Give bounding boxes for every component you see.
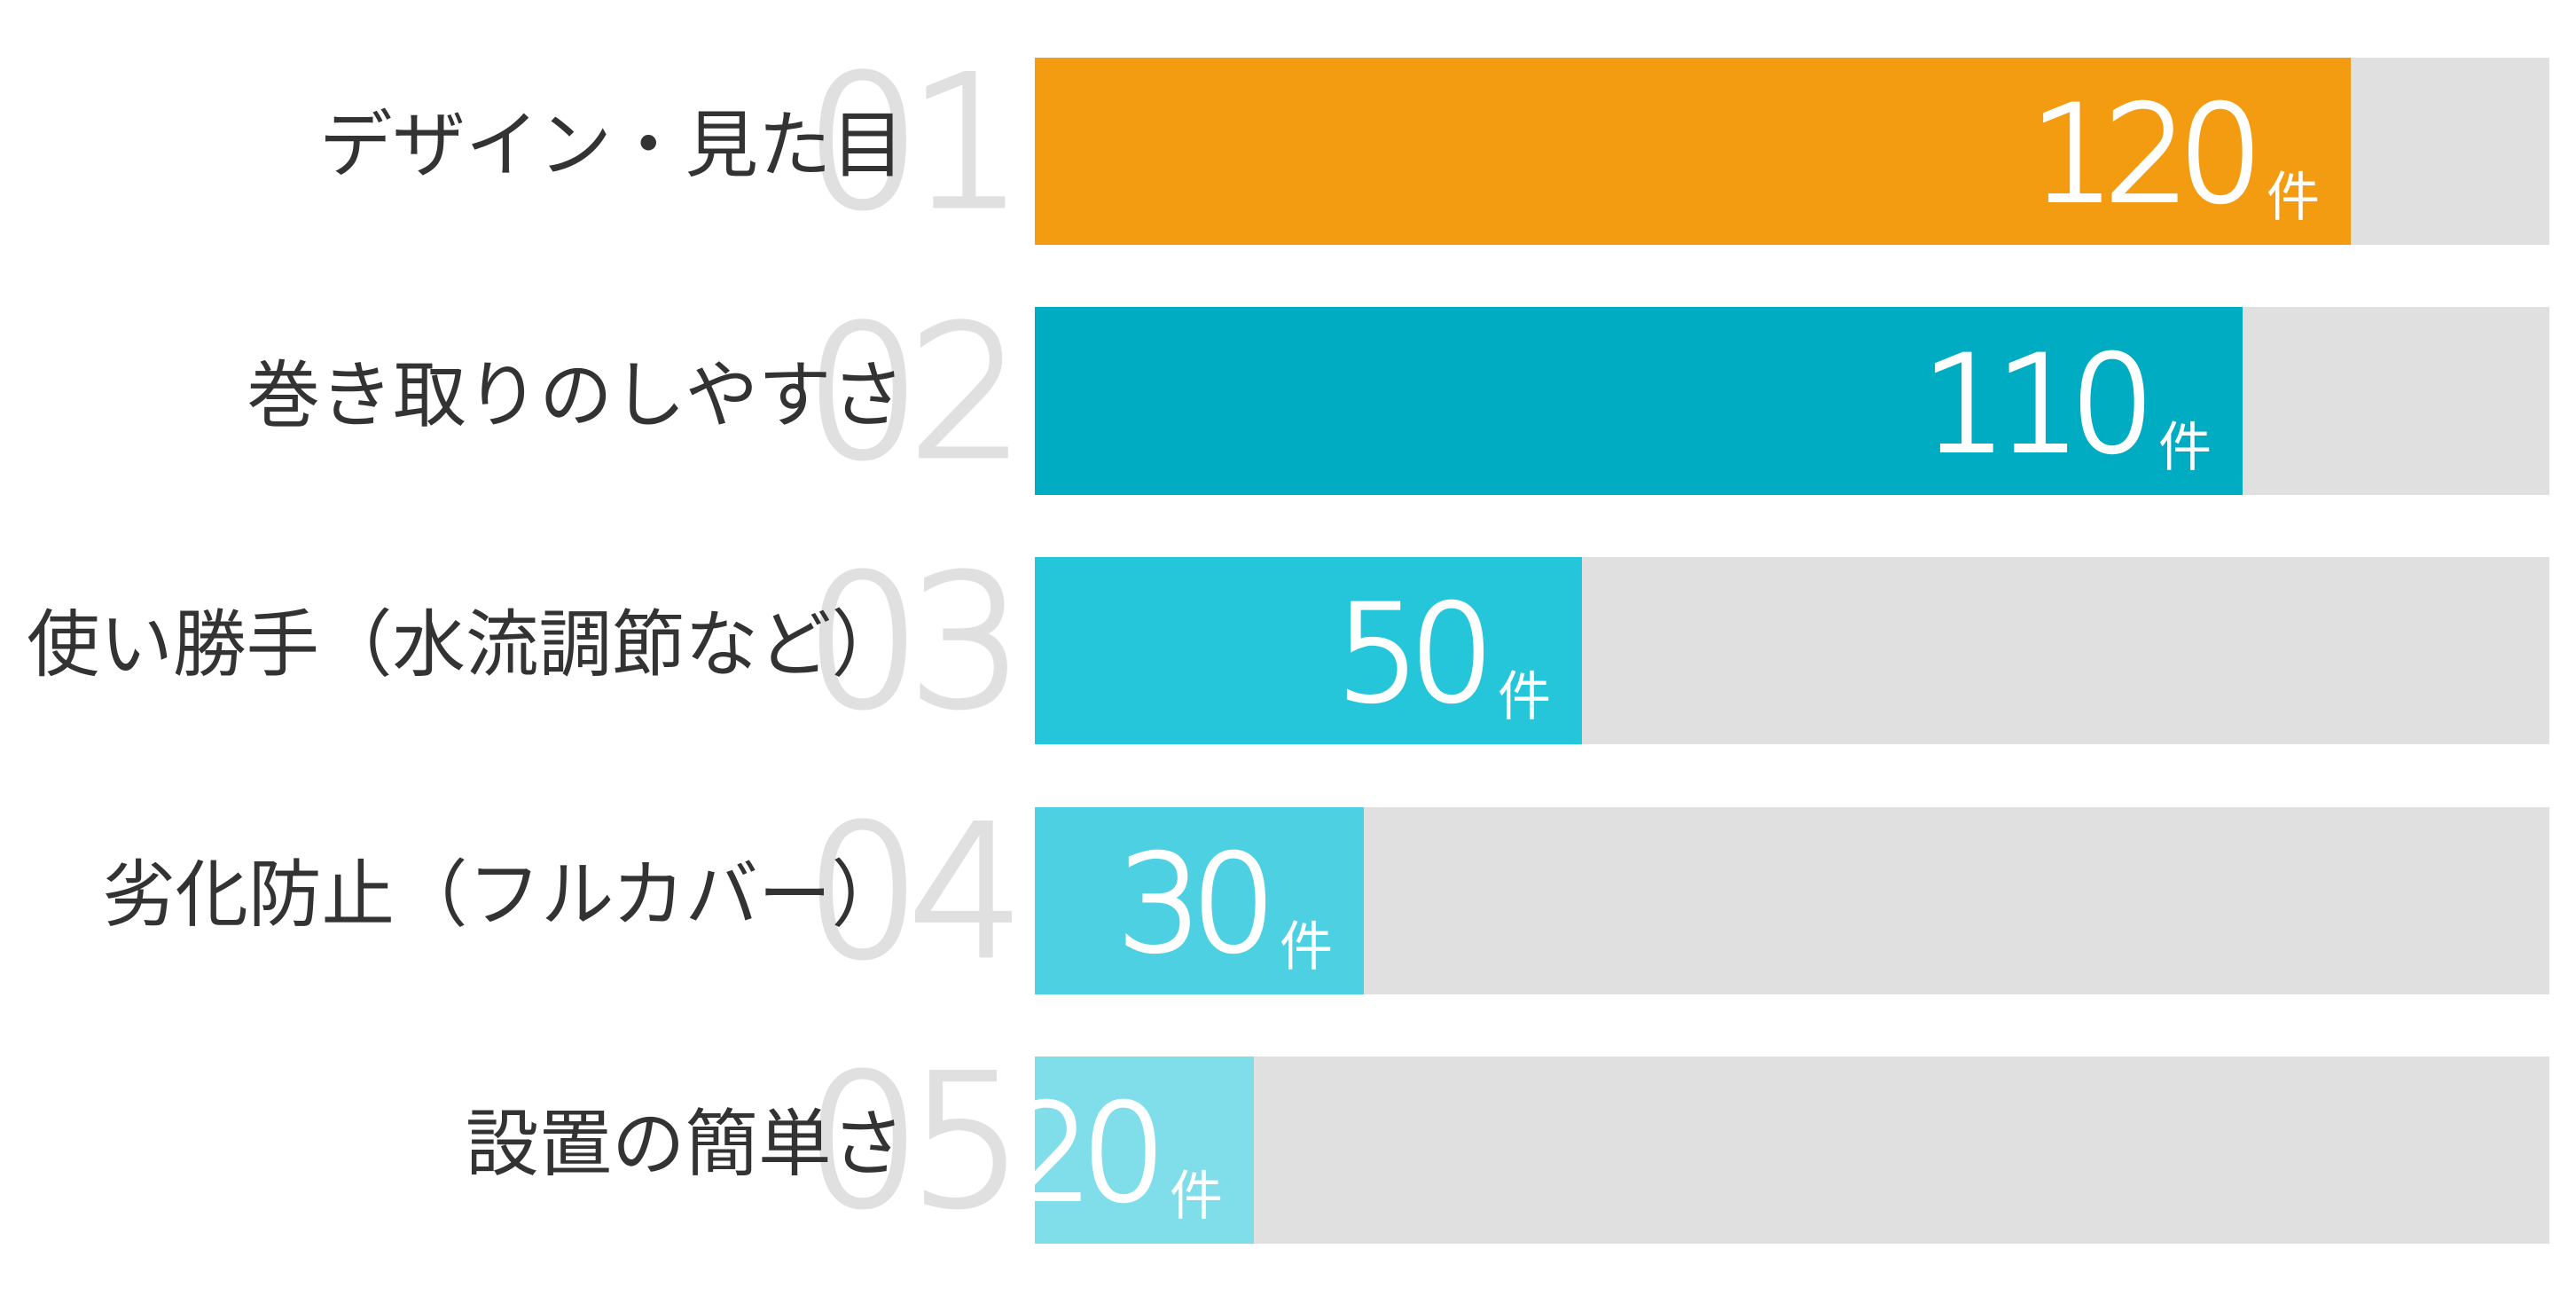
bar 5: 20 [1007,1077,1155,1231]
label: installation: 設置の簡単さ [466,1104,904,1185]
row 4: deterioration [106,807,2549,994]
rank number 01: 01 [805,38,1012,249]
bar 5 [1007,1057,2549,1244]
bar 5: 件 [1170,1167,1223,1226]
bar 3: 50 [1335,577,1484,732]
bar 4 [1035,807,2549,994]
bar 4: 件 [1280,917,1333,977]
bar 2: 件 [2158,418,2212,477]
bar 1 [1035,58,2549,245]
row 2: winding [249,307,2549,495]
label: deterioration: 劣化防止（フルカバー） [102,854,904,936]
bar 1: 120 [2031,78,2252,232]
bar 3: 件 [1498,667,1551,727]
label: winding: 巻き取りのしやすさ [247,355,904,436]
bar 1: 件 [2267,168,2320,227]
rank number 05: 05 [805,1037,1012,1248]
rank number 02: 02 [805,288,1012,499]
bar 2: 110 [1922,328,2144,483]
rank number 04: 04 [805,788,1012,999]
rank number 03: 03 [805,538,1012,749]
label: design: デザイン・見た目 [319,105,904,186]
label: usability: 使い勝手（水流調節など） [27,604,904,686]
row 1: design [325,58,2549,245]
bar 2 [1035,307,2549,495]
bar 4: 30 [1117,828,1265,982]
bar 3 [1035,557,2549,744]
row 3: usability [28,557,2549,744]
row 5: installation [468,1057,2549,1244]
